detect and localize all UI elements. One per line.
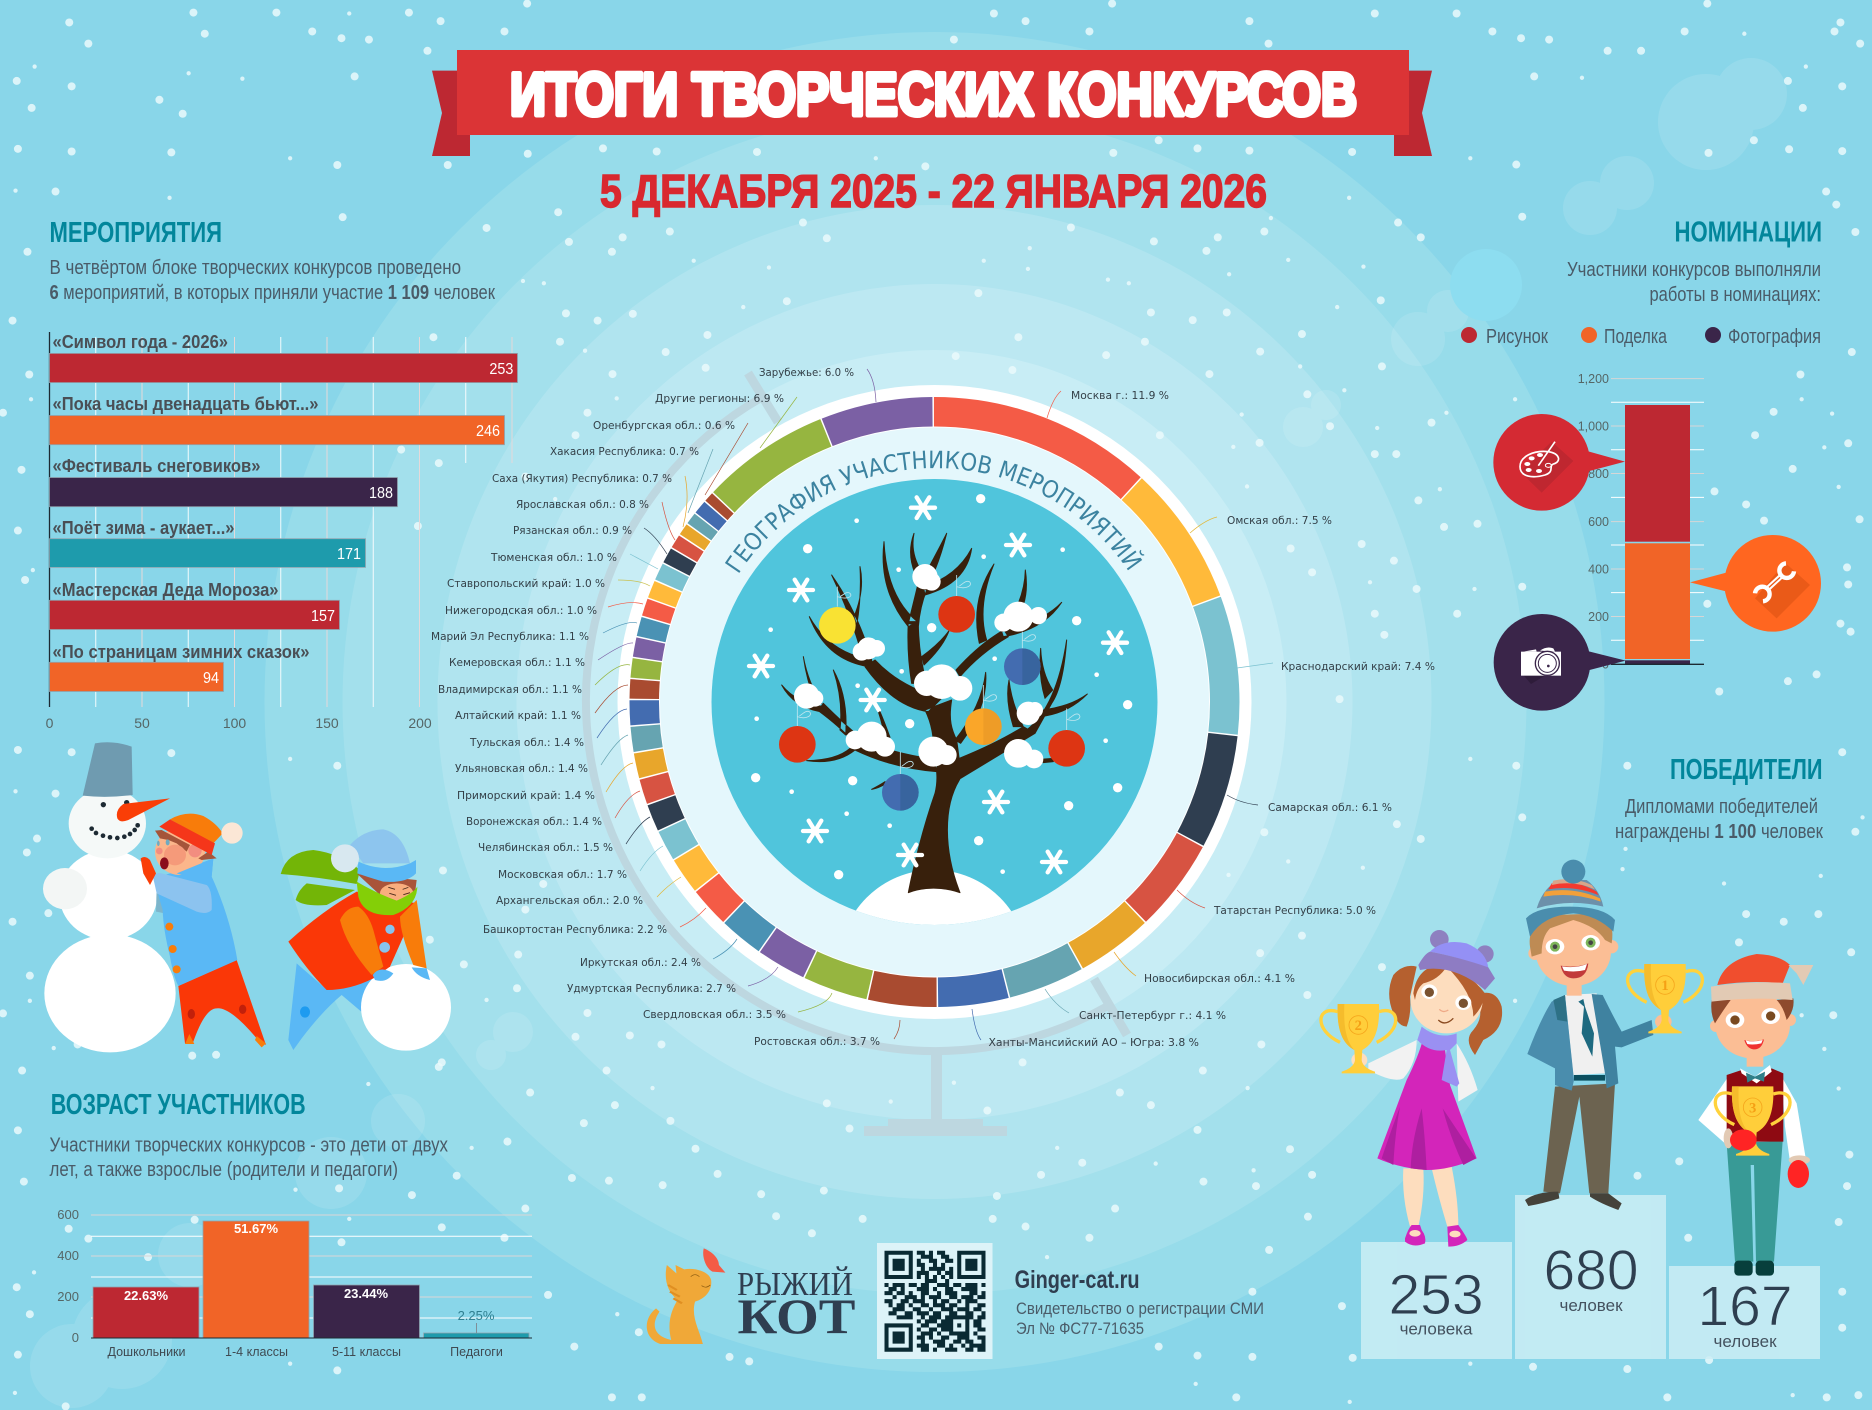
stacked bar chart: 800 — [1588, 467, 1609, 481]
stacked bar chart: 600 — [1588, 515, 1609, 529]
region labels: Тульская обл.: 1.4 % — [469, 736, 584, 749]
panel: winners — [1321, 754, 1823, 1359]
illustration: girl with trophy — [1321, 930, 1502, 1247]
logo: ginger cat: КОТ — [738, 1288, 856, 1344]
bar chart: age: 400 — [57, 1248, 79, 1263]
region labels: Марий Эл Республика: 1.1 % — [431, 630, 589, 643]
illustration: boy with first-place trophy — [1525, 860, 1702, 1210]
logo text: РЫЖИЙ — [737, 1266, 853, 1303]
heading: winners: ПОБЕДИТЕЛИ — [1670, 754, 1822, 786]
podium figures: человек — [1559, 1296, 1623, 1315]
bar chart: events: «Мастерская Деда Мороза» — [52, 580, 278, 600]
bar chart: events: 100 — [223, 715, 246, 731]
region labels: Башкортостан Республика: 2.2 % — [483, 923, 667, 936]
heading: events: МЕРОПРИЯТИЯ — [50, 217, 222, 249]
bar chart: events: 94 — [203, 670, 219, 687]
illustration: boy with third-place trophy — [1698, 954, 1813, 1276]
region labels: Ханты-Мансийский АО – Югра: 3.8 % — [988, 1036, 1199, 1049]
stacked bar chart — [1578, 372, 1704, 672]
podium figures — [1388, 1238, 1793, 1351]
leader lines — [595, 369, 1273, 1040]
text block: nominations intro — [1567, 259, 1821, 306]
text block: nominations intro: работы в номинациях: — [1650, 284, 1821, 306]
bar chart: events: «Пока часы двенадцать бьют...» — [52, 394, 318, 414]
region labels: Новосибирская обл.: 4.1 % — [1144, 972, 1295, 985]
bar chart: events: 188 — [369, 485, 393, 502]
bar chart: age: 0 — [72, 1330, 79, 1345]
text block: winners intro: Дипломами победителей — [1625, 796, 1818, 818]
region labels: Владимирская обл.: 1.1 % — [438, 683, 582, 696]
region labels: Воронежская обл.: 1.4 % — [466, 815, 602, 828]
tree illustration — [749, 494, 1132, 1059]
region labels: Алтайский край: 1.1 % — [455, 709, 581, 722]
publisher info — [1015, 1266, 1264, 1338]
bar chart: age — [57, 1207, 532, 1359]
region labels: Приморский край: 1.4 % — [457, 789, 595, 802]
region labels: Кемеровская обл.: 1.1 % — [449, 656, 585, 669]
publisher info: Свидетельство о регистрации СМИ — [1016, 1300, 1264, 1318]
icon: palette — [1520, 442, 1559, 477]
podium — [1361, 1195, 1820, 1359]
region labels: Самарская обл.: 6.1 % — [1268, 801, 1392, 814]
icon: camera — [1521, 648, 1561, 676]
region labels: Оренбургская обл.: 0.6 % — [593, 419, 735, 432]
text block: nominations intro: Участники конкурсов выполняли — [1567, 259, 1821, 281]
falling snowflakes — [749, 497, 1127, 872]
region labels: Иркутская обл.: 2.4 % — [580, 956, 701, 969]
panel: nominations — [1461, 216, 1822, 711]
region labels: Санкт-Петербург г.: 4.1 % — [1079, 1009, 1226, 1022]
region labels: Ярославская обл.: 0.8 % — [516, 498, 649, 511]
icon: cat — [647, 1248, 725, 1344]
bar chart: age: Педагоги — [450, 1345, 503, 1359]
text block: age intro: Участники творческих конкурсов - это дети от двух — [50, 1134, 448, 1156]
bar chart: age: 600 — [57, 1207, 79, 1222]
callout: drawing — [1493, 414, 1625, 511]
legend — [1461, 326, 1821, 348]
bar chart: events — [46, 332, 518, 731]
stacked bar chart: 1,200 — [1578, 372, 1609, 386]
legend: Фотография — [1728, 326, 1821, 348]
legend: Рисунок — [1486, 326, 1548, 348]
region labels: Краснодарский край: 7.4 % — [1281, 660, 1435, 673]
date subtitle: 5 ДЕКАБРЯ 2025 - 22 ЯНВАРЯ 2026 — [600, 165, 1267, 217]
bar chart: age: 22.63% — [124, 1288, 168, 1303]
callout: photo — [1494, 614, 1626, 711]
panel: age of participants — [50, 1089, 532, 1359]
snowman — [43, 742, 176, 1052]
heading: age: ВОЗРАСТ УЧАСТНИКОВ — [51, 1089, 306, 1121]
region labels: Свердловская обл.: 3.5 % — [643, 1008, 786, 1021]
bar chart: events: 0 — [46, 715, 54, 731]
title: ИТОГИ ТВОРЧЕСКИХ КОНКУРСОВ — [510, 61, 1357, 128]
bar chart: age: 5-11 классы — [332, 1345, 401, 1359]
stacked bar chart: 0 — [1602, 658, 1609, 672]
illustration: girl with trophy: 2 — [1355, 1018, 1362, 1034]
region labels: Зарубежье: 6.0 % — [759, 366, 854, 379]
region labels — [431, 366, 1435, 1049]
bar chart: events: 157 — [311, 608, 335, 625]
heading: nominations: НОМИНАЦИИ — [1674, 216, 1822, 248]
bar chart: age: 23.44% — [344, 1286, 388, 1301]
bar chart: age: 200 — [57, 1289, 79, 1304]
bar chart: events: «Фестиваль снеговиков» — [52, 456, 260, 476]
text block: winners intro: награждены 1 100 человек — [1615, 821, 1823, 843]
podium figures: человек — [1713, 1332, 1777, 1351]
publisher info: Ginger-cat.ru — [1015, 1266, 1140, 1294]
region labels: Тюменская обл.: 1.0 % — [490, 551, 617, 564]
region labels: Омская обл.: 7.5 % — [1227, 514, 1332, 527]
bar chart: age: 1-4 классы — [225, 1345, 288, 1359]
child rolling body — [141, 814, 266, 1047]
illustration: snowman and children — [43, 742, 451, 1052]
bar chart: events: «Поёт зима - аукает...» — [52, 518, 234, 538]
bar chart: events: 171 — [337, 546, 361, 563]
QR code — [877, 1243, 992, 1359]
bar chart: events: 150 — [315, 715, 339, 731]
region labels: Хакасия Республика: 0.7 % — [550, 445, 699, 458]
illustration: boy with first-place trophy: 1 — [1661, 978, 1669, 994]
last snowflake over trunk — [898, 845, 922, 865]
podium figures: человека — [1400, 1320, 1473, 1338]
ornaments — [779, 575, 1085, 811]
region labels: Ульяновская обл.: 1.4 % — [455, 762, 588, 775]
bar chart: events: 253 — [489, 361, 513, 378]
region labels: Нижегородская обл.: 1.0 % — [445, 604, 597, 617]
text block: events intro: 6 мероприятий, в которых приняли участие 1 109 человек — [50, 282, 495, 304]
logo: ginger cat — [647, 1248, 856, 1344]
region labels: Московская обл.: 1.7 % — [498, 868, 627, 881]
title ribbon — [432, 50, 1432, 156]
stacked bar chart: 400 — [1588, 562, 1609, 576]
bar chart: events: 246 — [476, 423, 500, 440]
globe stand — [586, 373, 1127, 1131]
stacked bar chart: 1,000 — [1578, 420, 1609, 434]
bar chart: events: 50 — [134, 715, 150, 731]
text block: winners intro — [1615, 796, 1823, 843]
illustration: boy with third-place trophy: 3 — [1749, 1100, 1756, 1116]
text block: events intro: В четвёртом блоке творческих конкурсов проведено — [50, 257, 461, 279]
ring segments — [644, 412, 1224, 992]
bar chart: events: «По страницам зимних сказок» — [52, 642, 310, 662]
stacked bar chart: 200 — [1588, 610, 1609, 624]
text block: age intro — [50, 1134, 448, 1181]
child with snowball — [281, 829, 451, 1051]
region labels: Другие регионы: 6.9 % — [655, 392, 784, 405]
snow on branches — [794, 564, 1047, 768]
tree trunk and branches — [782, 533, 1087, 893]
region labels: Удмуртская Республика: 2.7 % — [567, 982, 736, 995]
region labels: Ставропольский край: 1.0 % — [447, 577, 605, 590]
region labels: Челябинская обл.: 1.5 % — [478, 841, 613, 854]
panel: events — [46, 217, 518, 731]
icon: wrench — [1755, 563, 1794, 601]
podium figures: 167 — [1697, 1274, 1793, 1338]
bar chart: events: 200 — [408, 715, 432, 731]
region labels: Саха (Якутия) Республика: 0.7 % — [492, 472, 672, 485]
bar chart: age: Дошкольники — [107, 1345, 186, 1359]
region labels: Ростовская обл.: 3.7 % — [754, 1035, 880, 1048]
region labels: Архангельская обл.: 2.0 % — [496, 894, 643, 907]
curved chart title: ГЕОГРАФИЯ УЧАСТНИКОВ МЕРОПРИЯТИЙ — [725, 450, 1144, 573]
bar chart: events: «Символ года - 2026» — [52, 332, 228, 352]
region labels: Татарстан Республика: 5.0 % — [1213, 904, 1376, 917]
region labels: Рязанская обл.: 0.9 % — [513, 524, 632, 537]
panel: geography ring chart — [618, 385, 1252, 1019]
podium figures: 680 — [1543, 1238, 1639, 1302]
podium figures: 253 — [1388, 1263, 1484, 1327]
text block: events intro — [50, 257, 495, 304]
publisher info: Эл № ФС77-71635 — [1016, 1320, 1144, 1338]
legend: Поделка — [1604, 326, 1668, 348]
callout: craft — [1690, 535, 1821, 632]
region labels: Москва г.: 11.9 % — [1071, 389, 1169, 402]
bar chart: age: 2.25% — [458, 1308, 495, 1323]
text block: age intro: лет, а также взрослые (родители и педагоги) — [50, 1159, 398, 1181]
bar chart: age: 51.67% — [234, 1221, 278, 1236]
